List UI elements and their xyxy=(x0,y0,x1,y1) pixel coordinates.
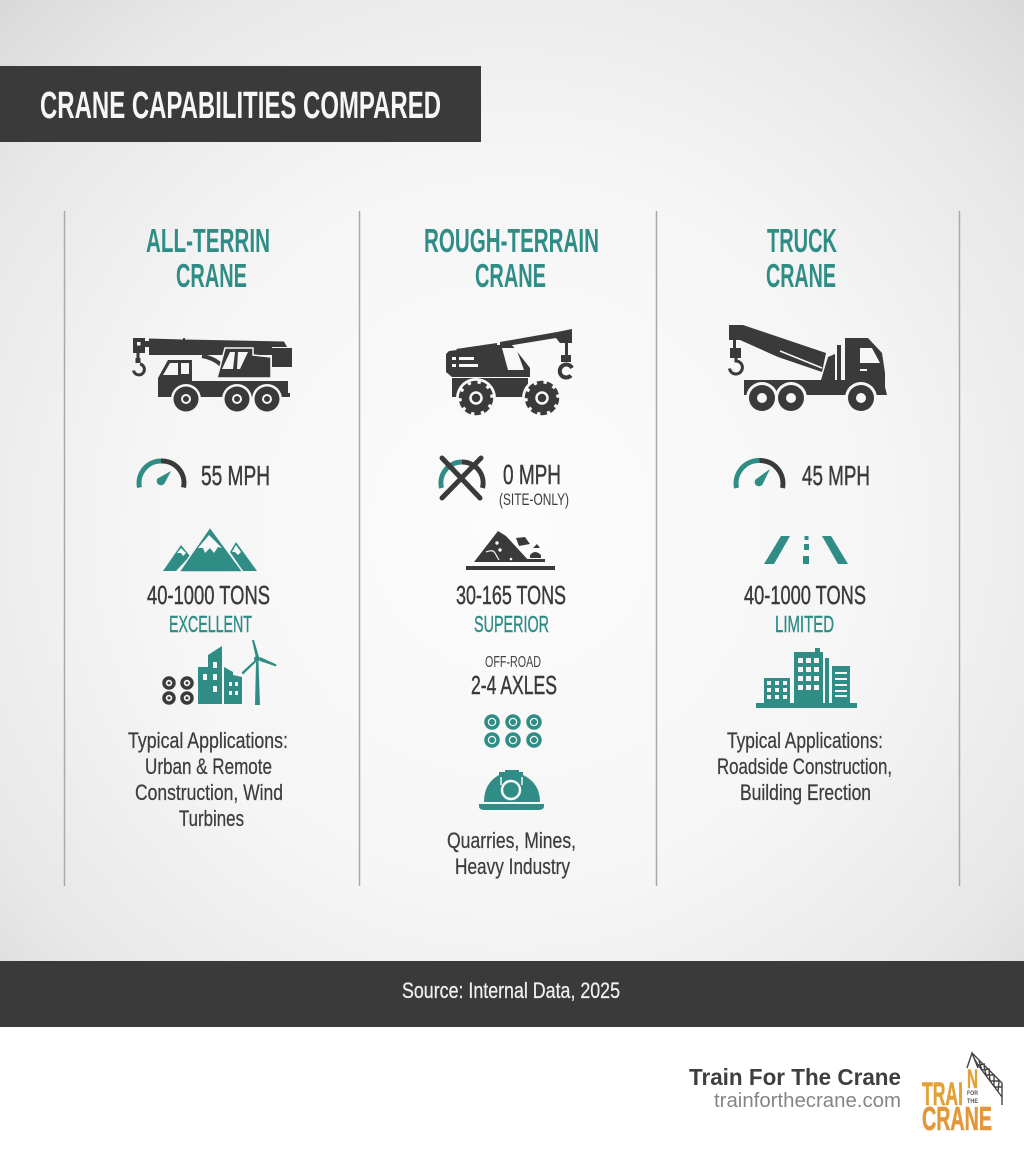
axle count: 2-4 AXLES xyxy=(471,670,557,700)
source bar xyxy=(0,961,1024,1027)
typical applications text: Turbines xyxy=(179,806,244,831)
typical applications text: Roadside Construction, xyxy=(717,754,892,779)
off-road label: OFF-ROAD xyxy=(485,654,541,671)
typical applications text xyxy=(447,828,576,879)
icon: crossed-out speedometer xyxy=(441,458,483,498)
speed value: (SITE-ONLY) xyxy=(499,490,569,509)
typical applications text: Typical Applications: xyxy=(128,728,288,753)
typical applications text: Urban & Remote xyxy=(145,754,272,779)
panel: rough-terrain crane xyxy=(424,222,599,879)
speed value: 45 MPH xyxy=(802,460,870,491)
speed value: 55 MPH xyxy=(201,460,270,491)
brand name and url xyxy=(689,1064,901,1112)
icon: city buildings xyxy=(756,648,857,708)
heading: rough-terrain crane: CRANE xyxy=(475,257,546,294)
icon: speedometer xyxy=(736,460,783,488)
heading: truck crane: CRANE xyxy=(766,257,836,294)
lifting capacity: 30-165 TONS xyxy=(456,580,566,610)
typical applications text: Quarries, Mines, xyxy=(447,828,576,853)
icon: road xyxy=(764,536,848,564)
speed value: 0 MPH xyxy=(503,459,561,490)
typical applications text xyxy=(128,728,288,831)
heading: truck crane xyxy=(766,222,837,294)
terrain rating: SUPERIOR xyxy=(474,611,549,637)
speed value xyxy=(499,459,569,509)
lifting capacity: 40-1000 TONS xyxy=(147,580,270,610)
heading: rough-terrain crane: ROUGH-TERRAIN xyxy=(424,222,599,259)
lifting capacity: 40-1000 TONS xyxy=(744,580,866,610)
logo: train for the crane xyxy=(922,1053,1002,1137)
logo: train for the crane: FOR xyxy=(967,1091,979,1097)
icon: all-terrain crane truck xyxy=(133,338,292,414)
icon: rough-terrain crane xyxy=(446,329,572,418)
icon: speedometer xyxy=(139,461,184,488)
heading: truck crane: TRUCK xyxy=(767,222,837,259)
heading: all-terrain crane xyxy=(146,222,270,294)
heading: rough-terrain crane xyxy=(424,222,599,294)
typical applications text: Typical Applications: xyxy=(727,728,883,753)
panel: truck crane xyxy=(717,222,892,805)
icon: hard hat xyxy=(479,770,544,810)
icon: axle wheels xyxy=(164,678,192,703)
icon: mountains xyxy=(163,527,257,572)
terrain rating: LIMITED xyxy=(775,611,834,637)
brand name and url: Train For The Crane xyxy=(689,1064,901,1090)
typical applications text: Heavy Industry xyxy=(455,854,570,879)
icon: truck crane xyxy=(729,325,887,414)
logo: train for the crane: TRAI xyxy=(922,1076,963,1112)
logo: train for the crane: THE xyxy=(967,1099,978,1105)
icon: city buildings and wind turbine xyxy=(198,640,276,705)
typical applications text: Construction, Wind xyxy=(135,780,283,805)
terrain rating: EXCELLENT xyxy=(169,611,252,637)
panel: all-terrain crane xyxy=(128,222,292,831)
brand name and url: trainforthecrane.com xyxy=(714,1090,901,1112)
title banner xyxy=(0,66,481,142)
title banner: CRANE CAPABILITIES COMPARED xyxy=(40,85,441,127)
icon: rubble pile xyxy=(466,531,555,570)
source bar: Source: Internal Data, 2025 xyxy=(402,978,620,1003)
typical applications text xyxy=(717,728,892,805)
heading: all-terrain crane: CRANE xyxy=(176,257,247,294)
heading: all-terrain crane: ALL-TERRIN xyxy=(146,222,270,259)
icon: axle wheels xyxy=(486,716,540,746)
typical applications text: Building Erection xyxy=(740,780,871,805)
logo: train for the crane: N xyxy=(967,1064,978,1094)
